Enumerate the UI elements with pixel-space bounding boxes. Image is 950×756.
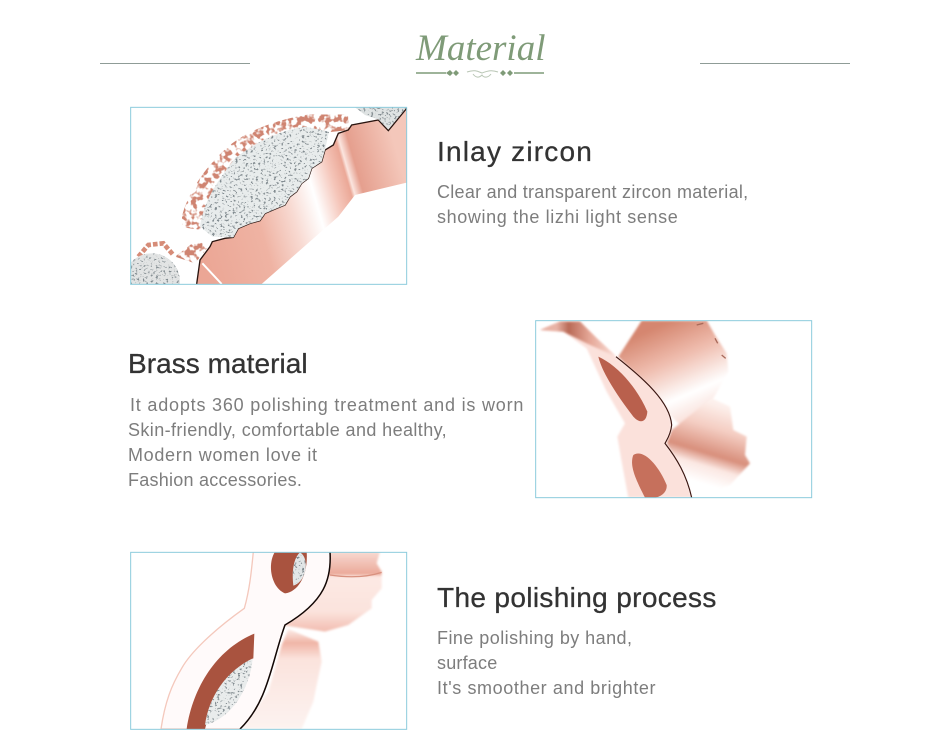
band edge line	[240, 552, 330, 729]
text: inlay zircon description: Clear and transparent zircon material,	[437, 182, 748, 202]
band edge line	[616, 357, 692, 498]
text: polishing process description	[437, 628, 656, 698]
text: inlay zircon description	[437, 182, 748, 227]
text: polishing process description: surface	[437, 653, 497, 673]
ring claws	[190, 120, 348, 228]
inner figure-eight band	[540, 322, 692, 498]
upper outer band	[282, 552, 382, 632]
round zircon	[131, 253, 180, 284]
upper opening	[598, 357, 647, 421]
text: polishing process description: It's smoother and brighter	[437, 678, 656, 698]
photo frame	[131, 107, 407, 284]
title text: Material	[416, 28, 545, 69]
upper outer band	[618, 321, 728, 428]
heading: polishing process: The polishing process	[437, 582, 717, 613]
heading: brass material: Brass material	[128, 348, 308, 379]
text: brass material description: It adopts 360 polishing treatment and is worn	[130, 395, 524, 415]
small zircon	[293, 552, 306, 586]
marquise zircon	[200, 127, 329, 237]
divider: right	[700, 63, 850, 64]
lower outer band	[666, 400, 751, 485]
ring band	[197, 108, 407, 284]
text: brass material description: Fashion accessories.	[128, 470, 302, 490]
lower opening	[632, 454, 667, 498]
large zircon	[205, 658, 253, 725]
title	[416, 28, 545, 78]
lower opening	[187, 634, 254, 729]
lower outer band	[242, 629, 322, 729]
upper opening	[271, 552, 307, 593]
inner figure-eight band	[161, 552, 330, 729]
text: brass material description: Skin-friendly, comfortable and healthy,	[128, 420, 447, 440]
right zircon	[355, 107, 407, 129]
heading: inlay zircon: Inlay zircon	[437, 136, 593, 167]
text: polishing process description: Fine polishing by hand,	[437, 628, 632, 648]
panel: brass material photo	[535, 320, 812, 498]
panel: polishing process photo	[130, 552, 408, 730]
text: brass material description: Modern women love it	[128, 445, 318, 465]
divider: left	[100, 63, 250, 64]
panel: inlay zircon photo	[130, 106, 408, 285]
title ornament	[416, 70, 544, 78]
text: brass material description	[128, 395, 524, 490]
text: inlay zircon description: showing the lizhi light sense	[437, 207, 678, 227]
